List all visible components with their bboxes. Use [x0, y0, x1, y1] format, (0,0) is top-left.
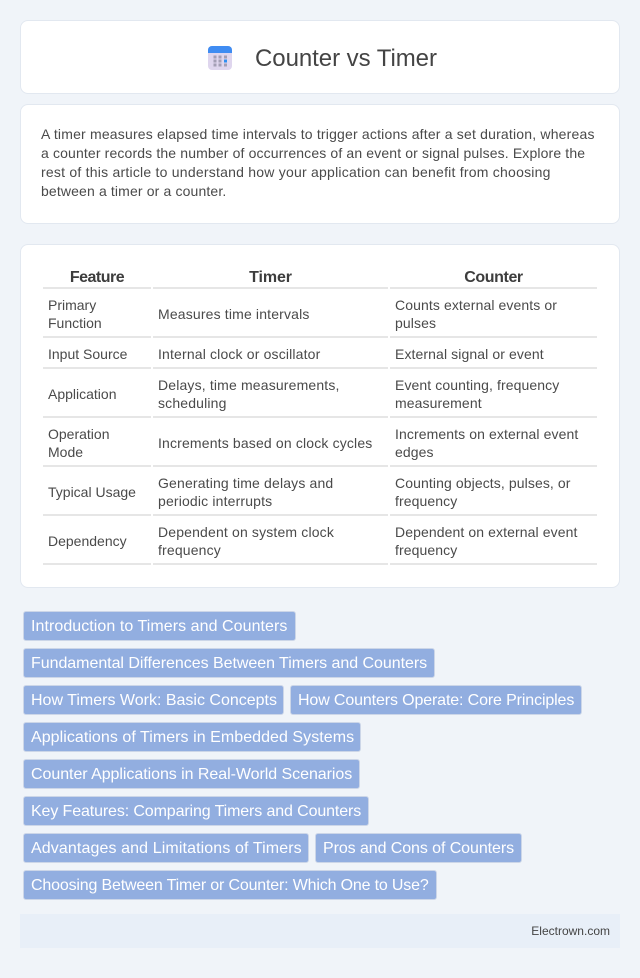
tag: fundamental differences — [23, 648, 435, 678]
row: input source: Input Source — [48, 346, 127, 362]
comparison table panel: Counter — [464, 269, 523, 286]
tag: counter applications: Counter Applications in Real-World Scenarios — [31, 766, 352, 783]
comparison table panel: Generating time delays and — [158, 475, 333, 491]
intro panel — [20, 104, 620, 224]
row: operation mode — [48, 426, 109, 460]
comparison table panel: Measures time intervals — [158, 306, 310, 322]
icon: calendar — [208, 46, 232, 70]
tag: key features — [23, 796, 369, 826]
tag: applications of timers: Applications of Timers in Embedded Systems — [31, 729, 354, 746]
comparison table panel: periodic interrupts — [158, 493, 272, 509]
comparison table panel: Increments on external event — [395, 426, 578, 442]
footer credit: Electrown.com — [531, 924, 610, 938]
comparison table panel: frequency — [395, 542, 457, 558]
comparison table panel: Increments based on clock cycles — [158, 435, 372, 451]
tag: introduction — [23, 611, 296, 641]
tag: pros and cons — [315, 833, 522, 863]
footer — [20, 914, 620, 948]
comparison table panel: frequency — [158, 542, 221, 558]
comparison table panel: edges — [395, 444, 434, 460]
comparison table panel: Counting objects, pulses, or — [395, 475, 571, 491]
row: operation mode: Mode — [48, 444, 83, 460]
tag: advantages and limitations: Advantages and Limitations of Timers — [31, 840, 302, 857]
tag: how timers work: How Timers Work: Basic Concepts — [31, 692, 277, 709]
tag: counter applications — [23, 759, 360, 789]
comparison table panel: Event counting, frequency — [395, 377, 559, 393]
comparison table panel: frequency — [395, 493, 457, 509]
row: operation mode: Operation — [48, 426, 109, 442]
tag: choosing between — [23, 870, 437, 900]
row: primary function: Primary — [48, 297, 96, 313]
row: dependency: Dependency — [48, 533, 127, 549]
title: Counter vs Timer — [255, 45, 437, 72]
row: application: Application — [48, 386, 116, 402]
row: typical usage: Typical Usage — [48, 484, 136, 500]
intro text: a counter records the number of occurrences of an event or signal pulses. Explore the — [41, 145, 585, 161]
table header: Feature — [70, 269, 124, 286]
comparison table panel: Dependent on system clock — [158, 524, 334, 540]
row: primary function — [48, 297, 102, 331]
tag: advantages and limitations — [23, 833, 309, 863]
tag: how counters operate: How Counters Operate: Core Principles — [298, 692, 574, 709]
comparison table panel: Counts external events or — [395, 297, 557, 313]
row: primary function: Function — [48, 315, 102, 331]
intro text: rest of this article to understand how your application can benefit from choosing — [41, 164, 551, 180]
tag: applications of timers — [23, 722, 361, 752]
intro text — [41, 126, 595, 199]
header panel — [20, 20, 620, 94]
tag: pros and cons: Pros and Cons of Counters — [323, 840, 514, 857]
comparison table panel: measurement — [395, 395, 482, 411]
tag: how timers work — [23, 685, 284, 715]
intro text: between a timer or a counter. — [41, 183, 226, 199]
tag: introduction: Introduction to Timers and Counters — [31, 618, 287, 635]
intro text: A timer measures elapsed time intervals to trigger actions after a set duration, whereas — [41, 126, 595, 142]
comparison table panel: scheduling — [158, 395, 227, 411]
comparison table panel: pulses — [395, 315, 436, 331]
tag: how counters operate — [290, 685, 582, 715]
comparison table panel: External signal or event — [395, 346, 544, 362]
comparison table panel: Timer — [249, 269, 292, 286]
tag: fundamental differences: Fundamental Differences Between Timers and Counters — [31, 655, 427, 672]
comparison table panel — [20, 244, 620, 588]
comparison table panel: Internal clock or oscillator — [158, 346, 320, 362]
tag: key features: Key Features: Comparing Timers and Counters — [31, 803, 361, 820]
comparison table panel: Dependent on external event — [395, 524, 578, 540]
tag: choosing between: Choosing Between Timer or Counter: Which One to Use? — [31, 877, 429, 894]
comparison table panel: Delays, time measurements, — [158, 377, 340, 393]
